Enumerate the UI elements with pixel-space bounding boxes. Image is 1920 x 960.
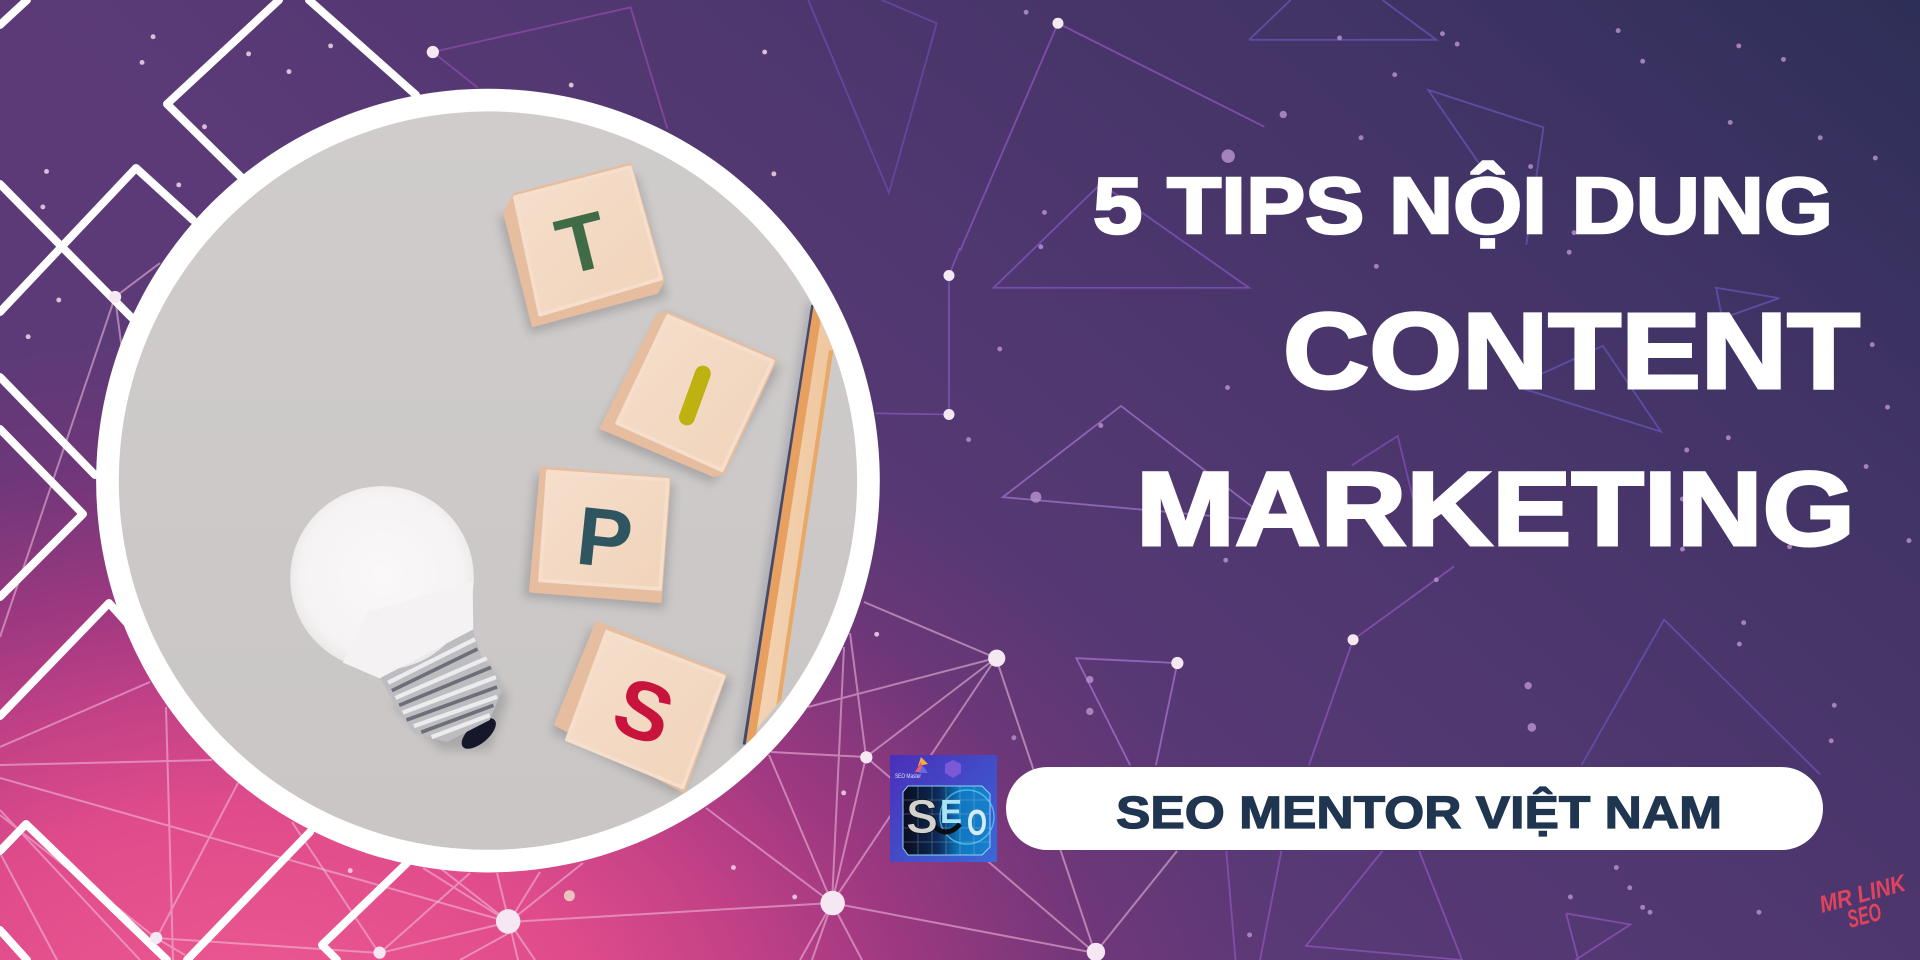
star dots: left half (26, 34, 879, 901)
network lines around the circle (0, 263, 1177, 960)
watermark: MR LINK SEO: MR LINK (1817, 870, 1910, 919)
block P: P (572, 489, 637, 587)
purple triangles: right half (960, 0, 1820, 960)
watermark: MR LINK SEO: SEO (1844, 898, 1885, 934)
block S: S (602, 658, 686, 764)
photo: tips blocks, pencil and light bulb (116, 110, 860, 851)
light bulb (290, 486, 508, 754)
star dots and nodes: right half (966, 10, 1911, 960)
title line 1: 5 TIPS NỘI DUNG (1093, 161, 1833, 250)
logo: SEO Mentor square: S (906, 791, 938, 844)
watermark: MR LINK SEO (1817, 870, 1910, 934)
block T: T (548, 194, 616, 292)
network nodes: left half (109, 46, 954, 959)
block T (499, 165, 667, 334)
title line 2: CONTENT (1283, 290, 1860, 411)
pill: brand banner (1006, 767, 1823, 850)
logo: SEO Mentor square: E (940, 793, 962, 830)
purple triangles: upper left (433, 0, 960, 414)
white diamond outlines (0, 0, 416, 960)
bulb screw base (380, 628, 502, 742)
logo: SEO Mentor square (890, 755, 997, 862)
block S (551, 623, 732, 796)
bulb glass (290, 486, 474, 678)
logo: SEO Mentor square: O (967, 802, 987, 843)
logo small mark: SEO Master (895, 774, 921, 780)
title line 3: MARKETING (1136, 451, 1855, 568)
block P (523, 468, 673, 609)
photo circle with white ring (96, 89, 880, 872)
block I (597, 312, 781, 484)
pencil (738, 303, 833, 750)
pill label: SEO MENTOR VIỆT NAM (1116, 787, 1722, 838)
